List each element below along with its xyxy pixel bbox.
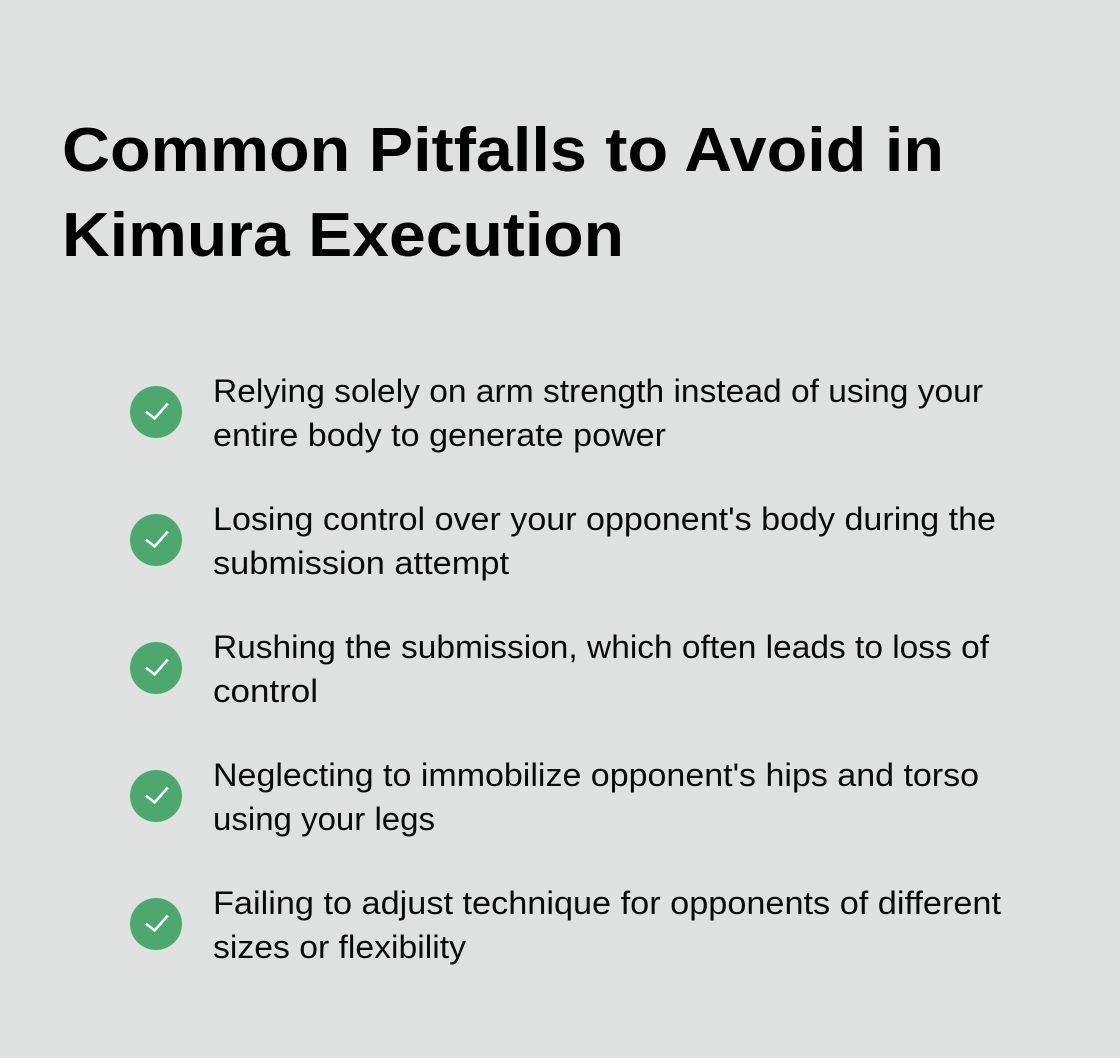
text: item 1 [213, 373, 983, 453]
list item 5 [130, 885, 1001, 965]
title: Kimura Execution [62, 201, 624, 270]
icon: green check 1 [130, 386, 182, 438]
icon: green check 2 [130, 514, 182, 566]
icon: green check 4 [130, 770, 182, 822]
icon: green check 5 [130, 898, 182, 950]
text: item 5 [213, 885, 1001, 965]
list item 3 [130, 629, 989, 709]
icon: green check 3 [130, 642, 182, 694]
text: item 4: using your legs [213, 801, 435, 837]
text: item 3: Rushing the submission, which often leads to loss of [213, 629, 989, 665]
text: item 3: control [213, 673, 318, 709]
text: item 2 [213, 501, 996, 581]
title: Common Pitfalls to Avoid in [62, 116, 944, 185]
text: item 1: entire body to generate power [213, 417, 666, 453]
list item 1 [130, 373, 983, 453]
text: item 2: Losing control over your opponent's body during the [213, 501, 996, 537]
text: item 3 [213, 629, 989, 709]
list item 4 [130, 757, 979, 837]
text: item 1: Relying solely on arm strength instead of using your [213, 373, 983, 409]
text: item 5: sizes or flexibility [213, 929, 466, 965]
text: item 4 [213, 757, 979, 837]
list item 2 [130, 501, 996, 581]
text: item 2: submission attempt [213, 545, 509, 581]
text: item 5: Failing to adjust technique for opponents of different [213, 885, 1001, 921]
list of pitfalls [130, 373, 1001, 965]
title [62, 116, 944, 270]
text: item 4: Neglecting to immobilize opponent's hips and torso [213, 757, 979, 793]
